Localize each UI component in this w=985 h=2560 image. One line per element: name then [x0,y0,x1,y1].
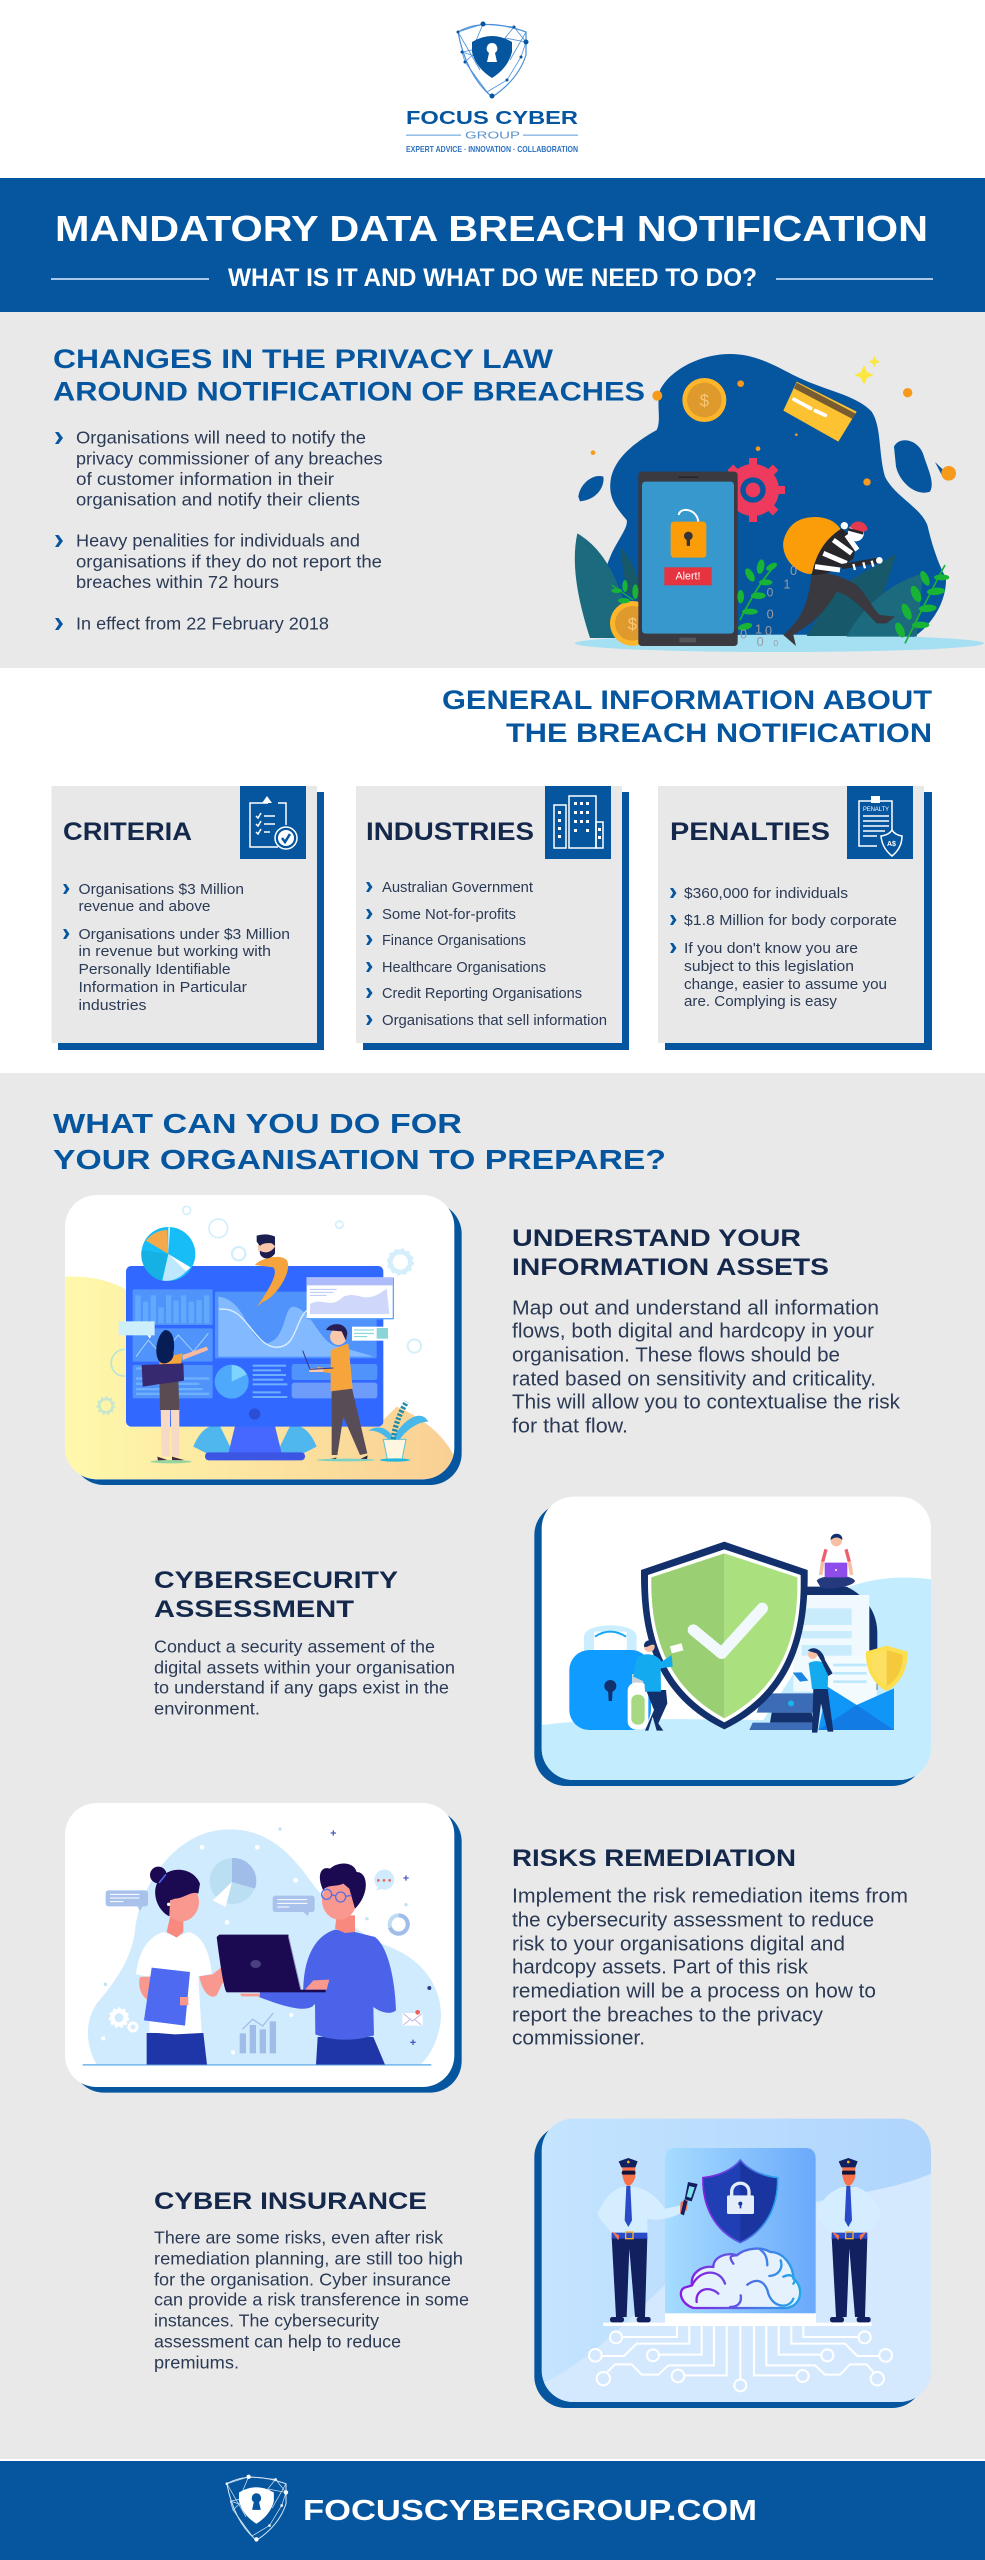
usb [632,1674,643,1686]
bullet list: In effect from 22 February 2018 [76,614,329,634]
body text: remediation planning, are still too high [154,2248,463,2268]
list: Organisations that sell information [382,1012,607,1029]
heading: CYBERSECURITY [154,1567,398,1594]
illustration: phone alert and thief: $ [628,614,637,633]
plants behind stand [193,1425,317,1453]
list [366,879,607,1029]
list: Finance Organisations [382,932,526,949]
body text [512,1886,908,2050]
icon: checklist [240,786,306,859]
block: understand your information assets [512,1225,901,1438]
body text [154,1636,455,1718]
body text: premiums. [154,2352,239,2372]
list [63,881,290,1014]
icon: white network shield [226,2475,288,2542]
illustration: phone alert and thief [575,354,984,652]
speech bubbles [106,1890,148,1906]
heading: INDUSTRIES [366,818,534,846]
illustration: green shield and devices [534,1497,931,1786]
icon: penalty document: PENALTY [863,807,889,813]
bullet list: Organisations will need to notify the [76,428,366,448]
icon: penalty document: A$ [887,841,896,848]
binary digits: 0 [767,586,774,600]
laptop [217,1935,302,1992]
man [316,2037,385,2065]
pie chart [141,1227,195,1281]
gears [112,2011,126,2024]
icon: network shield [456,22,528,98]
website address: FOCUSCYBERGROUP.COM [303,2495,757,2527]
background blob [88,1829,441,2065]
heading [53,344,645,406]
heading: WHAT CAN YOU DO FOR [53,1108,462,1139]
main shield [641,1542,808,1729]
binary digits: 1 [783,577,790,591]
list: are. Complying is easy [684,993,837,1010]
subtitle: WHAT IS IT AND WHAT DO WE NEED TO DO? [228,264,757,292]
body text: environment. [154,1698,260,1718]
body text: report the breaches to the privacy [512,2004,823,2026]
heading: GENERAL INFORMATION ABOUT [442,685,933,715]
body text: Implement the risk remediation items from [512,1886,908,1908]
heading: INFORMATION ASSETS [512,1254,829,1281]
body text: Map out and understand all information [512,1298,879,1320]
body text: instances. The cybersecurity [154,2310,379,2330]
gear [721,458,785,522]
circuit [589,2326,892,2391]
list: change, easier to assume you [684,976,887,993]
bullet list: of customer information in their [76,469,334,489]
mail [402,2013,423,2026]
man on monitor [255,1257,288,1307]
heading: AROUND NOTIFICATION OF BREACHES [53,376,645,406]
body text: remediation will be a process on how to [512,1980,876,2002]
header logo [406,22,578,154]
binary digits: 0 [773,638,778,648]
sparkles [854,365,874,385]
body text: organisation. These flows should be [512,1344,840,1366]
card: industries [356,786,629,1050]
heading: UNDERSTAND YOUR [512,1225,801,1252]
heading [154,1567,398,1623]
heading: ASSESSMENT [154,1596,354,1623]
binary digits [740,564,797,649]
body text: the cybersecurity assessment to reduce [512,1910,874,1932]
body text: This will allow you to contextualise the risk [512,1392,901,1414]
panel: what can you do [0,1073,985,2459]
person left [645,1690,667,1731]
card: penalties [658,786,932,1050]
illustration: phone alert and thief: $ [700,391,709,410]
credit card [783,382,857,442]
panel: general information [52,685,933,1050]
list: Personally Identifiable [78,961,231,978]
body text: to understand if any gaps exist in the [154,1678,449,1698]
block: cyber insurance [154,2188,469,2372]
heading: YOUR ORGANISATION TO PREPARE? [53,1144,666,1175]
heading [442,685,933,748]
man with laptop [332,1388,367,1455]
bullet list: Heavy penalities for individuals and [76,530,360,550]
woman with tablet [161,1408,179,1457]
window card [307,1277,394,1319]
logo group line: GROUP [465,130,520,142]
main title: MANDATORY DATA BREACH NOTIFICATION [55,208,928,249]
body text: digital assets within your organisation [154,1658,455,1678]
body text: assessment can help to reduce [154,2332,401,2352]
list: revenue and above [78,898,210,915]
body text: for that flow. [512,1416,628,1438]
list: $360,000 for individuals [684,885,848,902]
coin [682,378,726,422]
body text: commissioner. [512,2028,645,2050]
binary digits: 0 [767,607,774,621]
list: Organisations $3 Million [78,881,244,898]
list: Healthcare Organisations [382,959,546,976]
list: industries [78,997,146,1014]
bullet list: organisation and notify their clients [76,490,360,510]
bullet list: privacy commissioner of any breaches [76,448,382,468]
list: Australian Government [382,879,534,896]
heading: PENALTIES [670,818,830,846]
coin lower [610,601,655,646]
illustration: guards, shield and cloud brain [534,2119,931,2408]
plants [611,559,949,643]
body text: flows, both digital and hardcopy in your [512,1320,874,1342]
body text: can provide a risk transference in some [154,2290,469,2310]
binary digits: 1 [755,622,762,636]
heading: THE BREACH NOTIFICATION [506,718,932,748]
body text [154,2228,469,2372]
heading [53,1108,666,1175]
stand [228,1426,282,1453]
block: risks remediation [512,1845,908,2050]
icon: penalty document [847,786,913,859]
logo wordmark: FOCUS CYBER [406,108,578,128]
phone [638,472,738,646]
binary digits: 0 [790,564,797,578]
shield [703,2160,778,2243]
guard right [816,2158,881,2322]
body text: for the organisation. Cyber insurance [154,2270,451,2290]
binary digits: 0 [740,627,747,641]
heading: RISKS REMEDIATION [512,1845,796,1872]
heading [512,1225,829,1281]
body text: There are some risks, even after risk [154,2228,443,2248]
heading: CHANGES IN THE PRIVACY LAW [53,344,554,374]
icon: buildings [545,786,611,859]
logo tagline: EXPERT ADVICE · INNOVATION · COLLABORATION [406,144,578,154]
illustration: dashboard monitor team [65,1195,462,1485]
list: $1.8 Million for body corporate [684,912,897,929]
body text: risk to your organisations digital and [512,1934,845,1956]
heading: CRITERIA [63,818,192,846]
body text: hardcopy assets. Part of this risk [512,1956,809,1978]
document and monitor [803,1587,877,1690]
list: in revenue but working with [78,943,271,960]
woman [147,2033,207,2065]
list [670,885,897,1010]
bullet list: organisations if they do not report the [76,552,382,572]
footer banner [0,2461,985,2560]
body text [512,1298,901,1438]
person right [812,1688,833,1733]
list: Credit Reporting Organisations [382,985,582,1002]
bullet list: breaches within 72 hours [76,572,279,592]
bars [240,2021,276,2053]
binary digits: 0 [765,624,772,638]
small shield [866,1646,907,1691]
pie chart [210,1858,256,1904]
list: If you don't know you are [684,940,858,957]
panel: changes in the privacy law [0,312,985,668]
list: Some Not-for-profits [382,906,516,923]
padlock [584,1625,637,1653]
plant pot [383,1439,406,1459]
list: subject to this legislation [684,958,854,975]
card: criteria [52,786,324,1050]
list: Organisations under $3 Million [78,926,290,943]
title banner [0,178,985,312]
center panel [665,2148,816,2313]
cloud brain [681,2249,800,2308]
heading: CYBER INSURANCE [154,2188,427,2215]
block: cybersecurity assessment [154,1567,455,1718]
list: Information in Particular [78,979,247,996]
binary digits: 0 [757,635,764,649]
body text: rated based on sensitivity and criticality. [512,1368,876,1390]
illustration: phone alert and thief: Alert! [676,570,700,582]
monitor [126,1266,383,1427]
person on top [817,1576,855,1588]
illustration: two colleagues with laptop [65,1803,462,2093]
guard left [598,2158,698,2322]
bullet list [55,428,382,634]
thief [783,517,843,574]
body text: Conduct a security assement of the [154,1636,435,1656]
